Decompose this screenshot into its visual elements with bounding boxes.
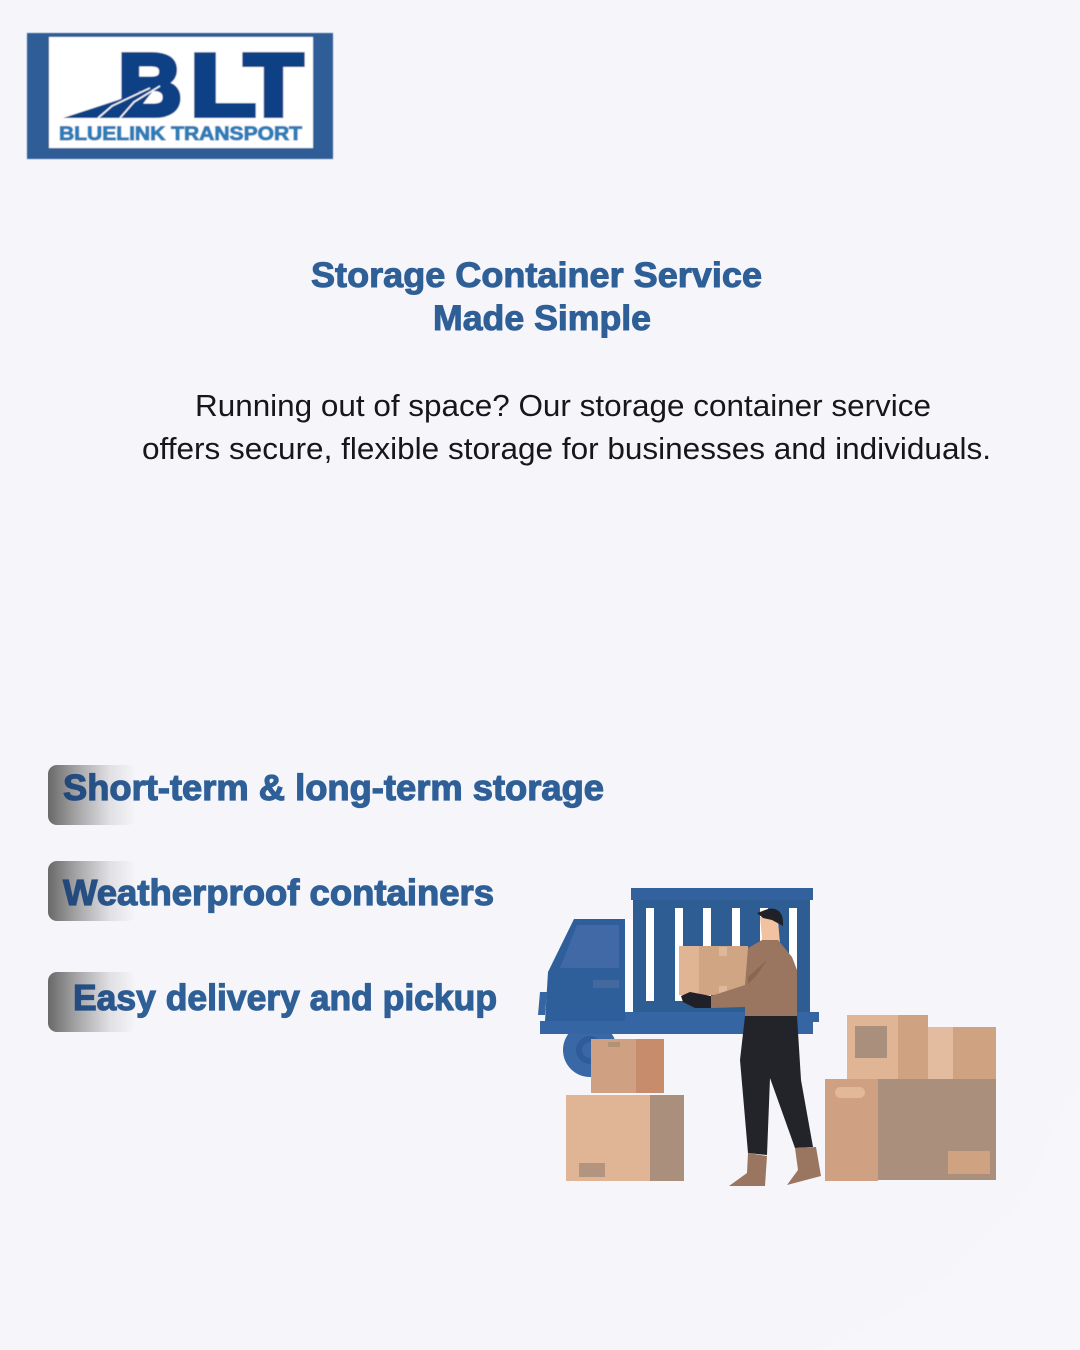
feature: easy delivery and pickup: Easy delivery and pickup bbox=[73, 977, 497, 1018]
icon: stacked boxes left bbox=[566, 1039, 684, 1181]
logo: Bluelink Transport: B bbox=[118, 36, 182, 134]
icon: stacked boxes right bbox=[825, 1015, 996, 1181]
title: Storage Container Service bbox=[311, 256, 762, 295]
logo: Bluelink Transport: BLUELINK TRANSPORT bbox=[59, 124, 302, 145]
intro text: offers secure, flexible storage for businesses and individuals. bbox=[142, 431, 991, 466]
feature: short-term and long-term storage: Short-term & long-term storage bbox=[63, 767, 604, 808]
icon: worker carrying box bbox=[679, 909, 821, 1186]
feature: weatherproof containers: Weatherproof containers bbox=[63, 872, 494, 913]
feature: weatherproof containers bbox=[48, 861, 494, 921]
feature: short-term and long-term storage bbox=[48, 765, 604, 825]
intro text bbox=[142, 388, 991, 466]
intro text: Running out of space? Our storage container service bbox=[195, 388, 931, 423]
logo: Bluelink Transport: L bbox=[190, 36, 256, 134]
title bbox=[311, 256, 762, 338]
feature: easy delivery and pickup bbox=[48, 972, 497, 1032]
logo: Bluelink Transport: T bbox=[244, 36, 303, 134]
illustration: worker loading boxes onto truck bbox=[538, 888, 996, 1186]
logo: Bluelink Transport bbox=[27, 33, 333, 159]
icon: truck bbox=[538, 888, 819, 1077]
title: Made Simple bbox=[433, 299, 651, 338]
